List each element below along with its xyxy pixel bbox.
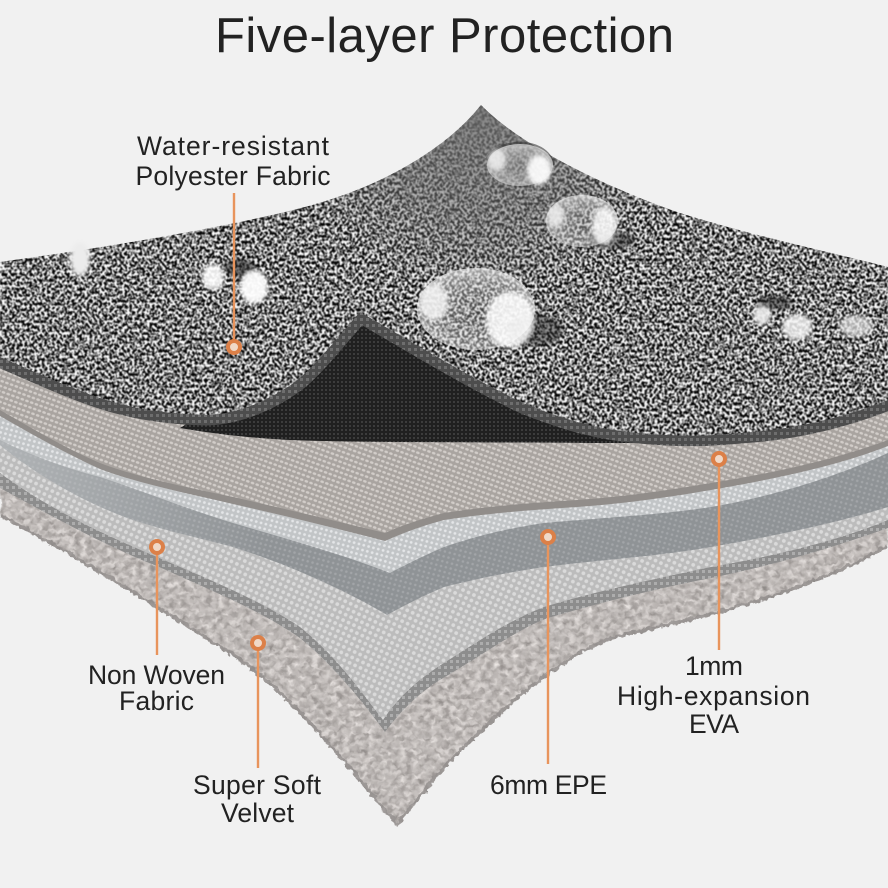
callout: water-resistant polyester fabric: Polyester Fabric xyxy=(136,161,330,191)
callout: super soft velvet xyxy=(193,637,322,828)
callout: 1mm high-expansion EVA xyxy=(617,453,810,739)
layer: EPE foam side xyxy=(0,420,888,615)
callout: super soft velvet: Velvet xyxy=(221,798,295,828)
layer: non woven fabric seam xyxy=(0,420,888,732)
title: Five-layer Protection xyxy=(215,9,674,63)
callout: non woven fabric xyxy=(88,541,225,716)
callout: non woven fabric: Fabric xyxy=(119,686,194,716)
layer: fabric seam xyxy=(0,312,888,436)
callout: super soft velvet: Super Soft xyxy=(193,770,322,800)
callout: 6mm EPE xyxy=(490,531,607,800)
water droplets xyxy=(70,144,873,350)
droplet 7 xyxy=(839,315,873,337)
droplet 1 xyxy=(487,144,553,186)
droplet 6 xyxy=(753,296,812,340)
callout: 6mm EPE: 6mm EPE xyxy=(490,770,607,800)
layer: water-resistant polyester fabric xyxy=(0,100,888,445)
callout: 1mm high-expansion EVA: High-expansion xyxy=(617,681,810,711)
droplet 3 xyxy=(417,268,563,350)
callout: 1mm high-expansion EVA: 1mm xyxy=(685,651,743,681)
droplet 2 xyxy=(546,195,636,249)
layer: lining xyxy=(0,340,888,533)
callout: water-resistant polyester fabric xyxy=(136,131,330,353)
droplet 4 xyxy=(202,259,268,304)
callout: water-resistant polyester fabric: Water-resistant xyxy=(137,131,330,161)
layer: non woven fabric xyxy=(0,420,888,720)
droplet 5 xyxy=(70,242,90,276)
callout: 1mm high-expansion EVA: EVA xyxy=(689,709,739,739)
layer: super soft velvet xyxy=(0,488,888,827)
layer: lining seam xyxy=(0,380,888,541)
layer: high-expansion EVA xyxy=(0,380,888,573)
layer: fabric underside xyxy=(180,318,650,443)
callout: non woven fabric: Non Woven xyxy=(88,660,225,690)
